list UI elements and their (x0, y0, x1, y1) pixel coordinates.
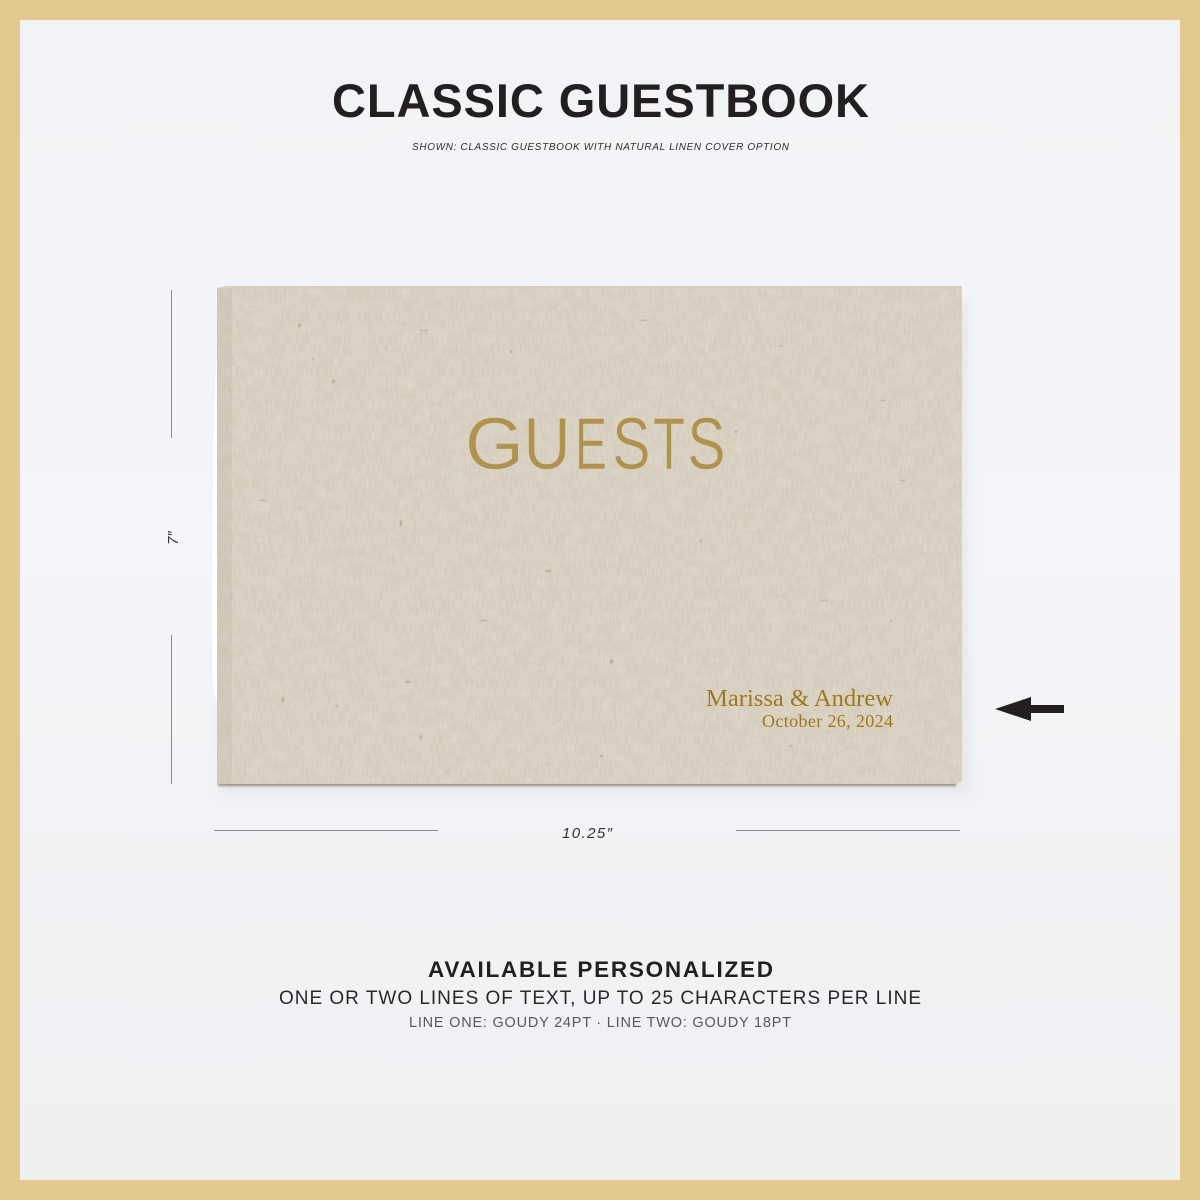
personalization details: ONE OR TWO LINES OF TEXT, UP TO 25 CHARACTERS PER LINE (279, 988, 921, 1009)
spine band (217, 288, 232, 784)
subtitle: SHOWN: CLASSIC GUESTBOOK WITH NATURAL LINEN COVER OPTION (412, 142, 790, 153)
title: CLASSIC GUESTBOOK (332, 74, 869, 127)
book cover (212, 286, 967, 792)
linen texture (217, 287, 962, 783)
foil title: GUESTS (465, 404, 725, 485)
arrow pointing to personalization (995, 697, 1064, 721)
foil title: GUESTS: T (653, 404, 685, 485)
foil title: GUESTS: S (612, 404, 650, 485)
foil date: October 26, 2024 (762, 711, 893, 731)
white page edge (212, 355, 217, 702)
linen cover (217, 286, 962, 784)
linen flecks (260, 320, 905, 757)
foil title: GUESTS: E (575, 404, 607, 485)
book shadow (222, 300, 967, 792)
width label: 10.25″ (562, 825, 613, 842)
foil names: Marissa & Andrew (706, 686, 894, 712)
height label: 7″ (165, 531, 182, 545)
font details: LINE ONE: GOUDY 24PT · LINE TWO: GOUDY 18PT (409, 1015, 791, 1031)
foil title: GUESTS: S (687, 404, 725, 485)
personalization heading: AVAILABLE PERSONALIZED (428, 957, 773, 982)
foil title: GUESTS: G (465, 404, 524, 485)
foil title: GUESTS: U (524, 404, 570, 485)
